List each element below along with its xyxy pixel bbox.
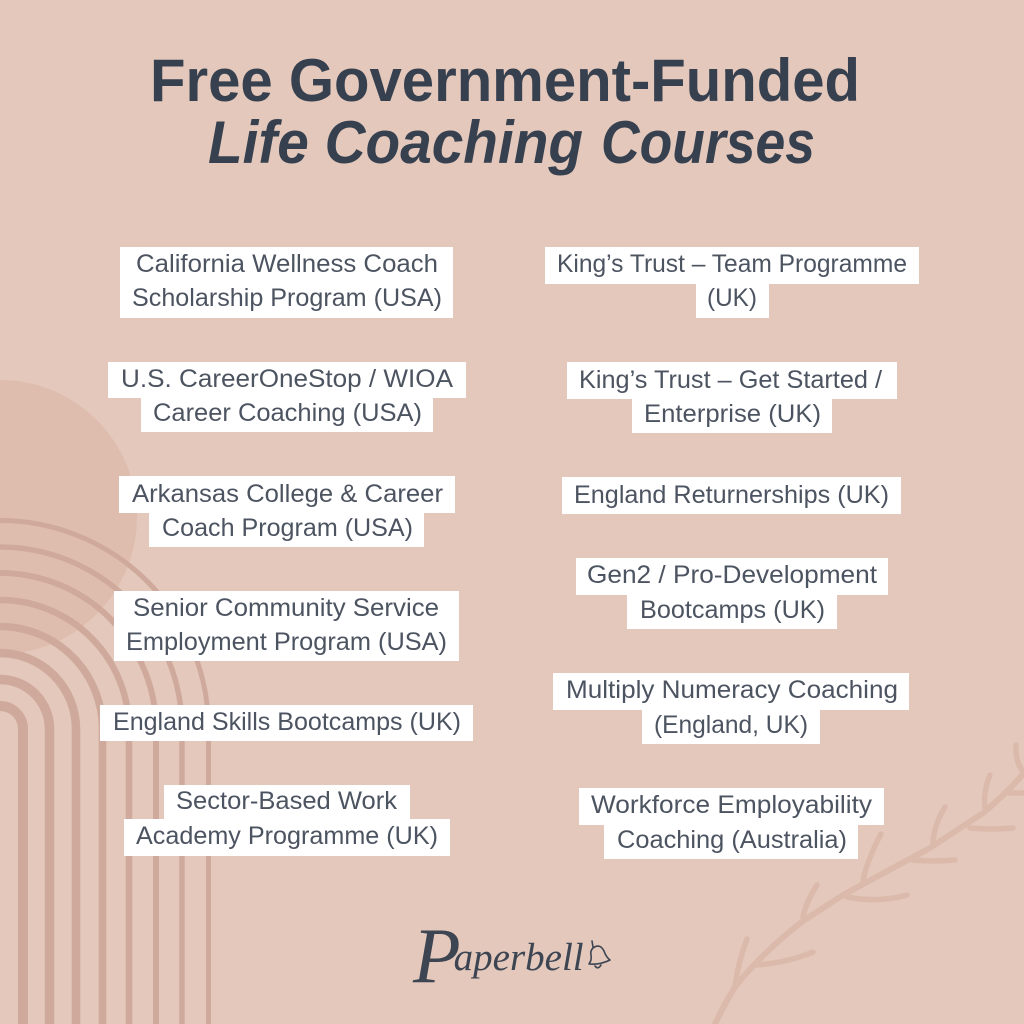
logo wordmark: P: [412, 912, 461, 999]
course: Senior Community Service: Senior Community Service: [133, 594, 439, 622]
course: Arkansas College: Arkansas College & Career: [132, 480, 443, 508]
logo wordmark: aperbell: [454, 936, 584, 979]
branch sprig: [715, 745, 1024, 1024]
course: U.S. CareerOneStop: [108, 362, 466, 432]
course: Multiply Numeracy: (England, UK): [654, 711, 808, 739]
course: Workforce Employability: Coaching (Australia): [617, 826, 847, 854]
course: U.S. CareerOneStop: U.S. CareerOneStop / WIOA: [121, 365, 453, 393]
course: Gen2 Pro-Development: Gen2 / Pro-Development: [587, 561, 877, 589]
course: King's Trust Team Programme: King’s Trust – Team Programme: [557, 250, 907, 278]
course: California Wellness Coach: [120, 247, 453, 318]
Paperbell logo: [412, 912, 610, 999]
course: England Returnerships: England Returnerships (UK): [574, 481, 889, 509]
title: [150, 47, 860, 176]
course: Multiply Numeracy: Multiply Numeracy Coaching: [566, 676, 898, 704]
course: Multiply Numeracy: [553, 673, 909, 744]
course: Workforce Employability: Workforce Employability: [591, 791, 873, 819]
icon: bell: [589, 941, 610, 968]
course: England Returnerships: [562, 477, 901, 514]
course: U.S. CareerOneStop: Career Coaching (USA): [153, 399, 422, 427]
right column of courses: [545, 247, 919, 859]
course: King's Trust Get Started: [567, 362, 897, 433]
title: Courses: [601, 109, 815, 176]
course: King's Trust Team Programme: [545, 247, 919, 318]
course: Sector-Based Work Academy: Academy Programme (UK): [136, 822, 438, 850]
course: Senior Community Service: [114, 591, 459, 661]
course: King's Trust Get Started: Enterprise (UK): [644, 400, 821, 428]
course: California Wellness Coach: California Wellness Coach: [136, 250, 438, 278]
course: King's Trust Team Programme: (UK): [707, 284, 757, 312]
decorative circle: [0, 380, 137, 654]
course: Sector-Based Work Academy: Sector-Based Work: [176, 787, 397, 815]
course: Senior Community Service: Employment Program (USA): [126, 628, 447, 656]
course: Gen2 Pro-Development: [576, 558, 888, 629]
course: Workforce Employability: [579, 788, 884, 859]
course: California Wellness Coach: Scholarship Program (USA): [132, 284, 442, 312]
title: Free Government-Funded: [150, 47, 860, 114]
course: King's Trust Get Started: King’s Trust – Get Started /: [579, 366, 882, 394]
title: Life Coaching: [208, 109, 583, 176]
course: Arkansas College: [119, 476, 455, 547]
course: Gen2 Pro-Development: Bootcamps (UK): [640, 596, 825, 624]
left column of courses: [100, 247, 473, 856]
course: Sector-Based Work Academy: [124, 785, 450, 856]
concentric arches: [0, 520, 208, 1024]
course: England Skills Bootcamps: England Skills Bootcamps (UK): [113, 708, 461, 736]
course: Arkansas College: Coach Program (USA): [162, 514, 413, 542]
